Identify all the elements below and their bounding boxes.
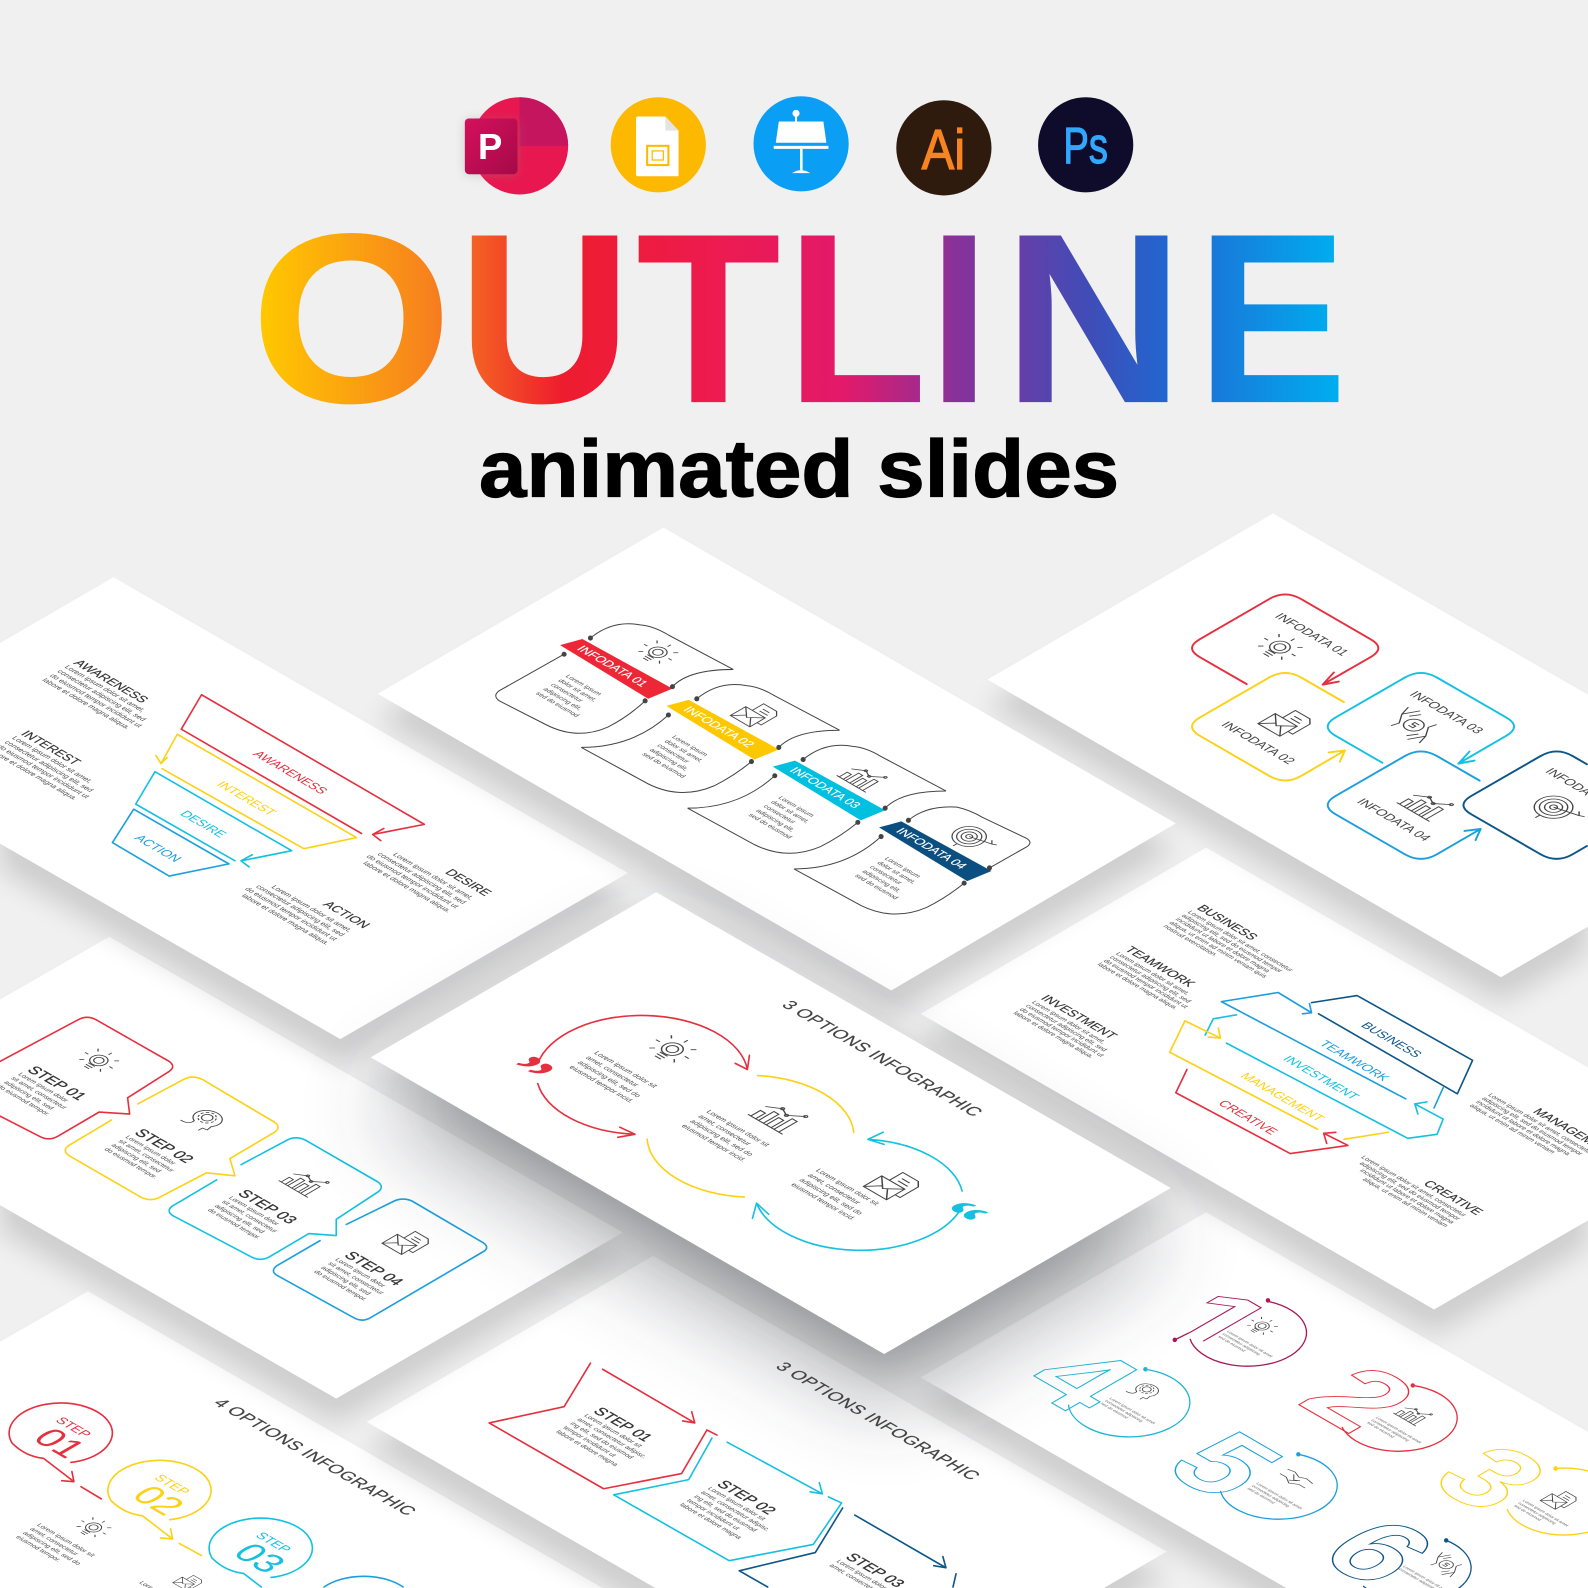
teamwork shape bbox=[1221, 992, 1443, 1108]
text: step 01: STEP 01 bbox=[23, 1064, 90, 1103]
text: step 02: do eiusmod tempor. bbox=[102, 1147, 159, 1180]
small lorem texts: sed do eiusmod bbox=[1217, 1335, 1248, 1353]
square labels bbox=[1218, 611, 1588, 843]
funnel: action bbox=[112, 809, 229, 876]
shape labels: INVESTMENT bbox=[1280, 1054, 1362, 1102]
number 1: 1 bbox=[1129, 1273, 1302, 1373]
text: investment bbox=[1011, 993, 1131, 1062]
text: investment: labore et dolore magna aliqua. bbox=[1011, 1011, 1095, 1059]
shape labels: BUSINESS bbox=[1358, 1020, 1425, 1059]
text: step 02 bbox=[102, 1126, 198, 1182]
icon: powerpoint bbox=[465, 97, 568, 194]
text: awareness bbox=[40, 657, 171, 733]
title: N bbox=[1003, 184, 1184, 454]
heading: 3 options: 3 OPTIONS INFOGRAPHIC bbox=[771, 1359, 985, 1483]
square 01 bbox=[1192, 594, 1378, 685]
text: management: aliqua, ut enim ad minim veniam bbox=[1467, 1103, 1557, 1155]
infodata 04: adipiscing elit, bbox=[860, 869, 903, 894]
text: option 2: eiusmod tempor incid. bbox=[679, 1123, 749, 1163]
text: action: labore et dolore magna aliqua. bbox=[239, 892, 332, 946]
text: step 01 lorem: Lorem ipsum dolor sit bbox=[35, 1523, 96, 1558]
text: creative: CREATIVE bbox=[1420, 1179, 1486, 1217]
icons bbox=[642, 1031, 923, 1203]
funnel: desire bbox=[136, 772, 292, 867]
infodata 04: consectetur bbox=[867, 865, 904, 886]
small lorem texts: consectetur adipiscing bbox=[1104, 1399, 1145, 1423]
small lorem texts: consectetur adipiscing bbox=[1251, 1484, 1292, 1508]
heading: 3 options: 3 OPTIONS INFOGRAPHIC bbox=[777, 998, 988, 1119]
text: desire bbox=[357, 837, 495, 916]
infodata 03 bbox=[688, 745, 946, 853]
step 02 circle: STEP bbox=[151, 1472, 194, 1497]
text: teamwork bbox=[1095, 944, 1215, 1013]
text: teamwork: TEAMWORK bbox=[1122, 944, 1199, 989]
text: step 01: STEP 01 bbox=[589, 1405, 656, 1444]
number 3: 3 bbox=[1404, 1428, 1577, 1528]
text: desire: do eiusmod tempor incididunt ut bbox=[364, 853, 461, 909]
title bbox=[250, 184, 1347, 454]
icon: illustrator bbox=[896, 100, 991, 195]
infodata 01: Lorem ipsum bbox=[563, 674, 603, 697]
text: option 3: amet, consectetur bbox=[805, 1172, 864, 1206]
text: interest: INTEREST bbox=[18, 729, 84, 767]
infodata 01 bbox=[496, 624, 733, 733]
shape labels: MANAGEMENT bbox=[1237, 1071, 1328, 1123]
infodata 04: Lorem ipsum bbox=[882, 856, 922, 879]
small lorem texts: Lorem ipsum dolor sit amet bbox=[1108, 1397, 1158, 1425]
text: step 03: sit amet, consectetur bbox=[219, 1200, 280, 1234]
text: investment: consectetur adipiscing elit, sed bbox=[1023, 1004, 1108, 1053]
text: action: Lorem ipsum dolor sit amet, bbox=[269, 884, 355, 933]
text: business: Lorem ipsum dolor sit amet, consectetur bbox=[1186, 910, 1295, 973]
title: O bbox=[250, 184, 453, 454]
text: option 2: amet, consectetur bbox=[696, 1113, 754, 1147]
step 01 box bbox=[0, 1017, 173, 1139]
infodata 04 bbox=[794, 807, 1030, 914]
text: step 02: labore et dolore magna bbox=[677, 1502, 743, 1540]
infodata 04: sed do eiusmod bbox=[853, 874, 900, 901]
icon: photoshop: Ps bbox=[1063, 117, 1108, 174]
text: awareness: do eiusmod tempor incididunt ut bbox=[48, 673, 145, 729]
text: creative: aliqua, ut enim ad minim veniam bbox=[1360, 1177, 1450, 1229]
text: step 01 bbox=[0, 1063, 91, 1119]
text: business: aliqua, ut enim ad minim veniam quis bbox=[1167, 921, 1269, 979]
infodata 03: Lorem ipsum bbox=[776, 796, 816, 819]
management shape bbox=[1170, 1021, 1388, 1139]
funnel labels: ACTION bbox=[131, 833, 185, 864]
panel: funnel bbox=[0, 577, 628, 1064]
text: desire: DESIRE bbox=[442, 867, 495, 898]
text: awareness: Lorem ipsum dolor sit amet, bbox=[62, 664, 148, 713]
text: step 01: sit amet, consectetur bbox=[9, 1076, 69, 1111]
heading: 4 options: 4 OPTIONS INFOGRAPHIC bbox=[209, 1396, 421, 1518]
small lorem texts: Lorem ipsum dolor sit amet bbox=[1226, 1330, 1275, 1358]
icon: mail bbox=[173, 1573, 204, 1588]
panel: hexagon list bbox=[921, 848, 1588, 1335]
panel: 3 options circles bbox=[371, 892, 1171, 1405]
infodata 04: dolor sit amet, bbox=[875, 861, 917, 885]
text: desire: Lorem ipsum dolor sit amet, bbox=[391, 851, 476, 901]
text: step 04: STEP 04 bbox=[340, 1249, 407, 1288]
funnel labels: INTEREST bbox=[213, 779, 280, 818]
text: interest: consectetur adipiscing elit, sed bbox=[2, 739, 96, 793]
panel: rounded squares bbox=[987, 513, 1588, 1003]
icons bbox=[1251, 630, 1588, 831]
infodata 03: dolor sit amet, bbox=[769, 800, 811, 824]
text: step 03: do eiusmod tempor. bbox=[205, 1208, 262, 1241]
text: step 03: adipiscing elit, sed bbox=[212, 1204, 266, 1235]
text: teamwork: do eiusmod tempor incididunt ut bbox=[1101, 959, 1189, 1009]
shape labels: TEAMWORK bbox=[1316, 1039, 1393, 1083]
text: business bbox=[1161, 902, 1308, 987]
funnel labels bbox=[131, 749, 331, 864]
creative shape bbox=[1176, 1069, 1348, 1154]
text: option 2: adipiscing elit, sed do bbox=[688, 1118, 756, 1157]
step 03 circle: STEP bbox=[252, 1530, 295, 1555]
text: option 3: Lorem ipsum dolor sit bbox=[814, 1167, 882, 1207]
small lorem texts: consectetur adipiscing bbox=[1221, 1332, 1262, 1356]
text: step 03: Lorem ipsum dolor bbox=[226, 1196, 281, 1227]
funnel labels: DESIRE bbox=[177, 809, 230, 839]
panel: 4 options infographic bbox=[0, 1291, 603, 1588]
text: action: consectetur adipiscing elit, sed bbox=[254, 883, 347, 938]
text: step 01: labore et dolore magna bbox=[554, 1430, 620, 1467]
text: creative bbox=[1341, 1147, 1486, 1231]
icons bbox=[73, 1045, 432, 1257]
title: I bbox=[929, 184, 989, 454]
title: E bbox=[1197, 184, 1347, 454]
text: step 02 bbox=[677, 1478, 794, 1545]
text: action: ACTION bbox=[320, 899, 373, 930]
text: step 04 bbox=[312, 1249, 408, 1304]
quote marks bbox=[482, 1047, 1002, 1241]
yellow arcs bbox=[647, 1076, 854, 1197]
small lorem texts: sed do eiusmod bbox=[1246, 1487, 1277, 1505]
small lorem texts: Lorem ipsum dolor sit amet bbox=[1255, 1482, 1304, 1510]
small lorem texts: Lorem ipsum dolor sit amet bbox=[1374, 1416, 1424, 1444]
infodata 03: INFODATA 03 bbox=[786, 765, 864, 810]
infodata 03: adipiscing elit, bbox=[754, 808, 796, 833]
business shape bbox=[1312, 996, 1473, 1094]
text: creative: adipiscing elit, sed do eiusmod tempor bbox=[1357, 1161, 1462, 1222]
text: management: incididunt ut labore et dolore magna bbox=[1474, 1100, 1572, 1157]
step 02 circle: 02 bbox=[123, 1480, 194, 1521]
text: step 01: tempor incididunt ut bbox=[561, 1425, 618, 1458]
small lorem texts: consectetur adipiscing bbox=[1370, 1418, 1411, 1442]
text: option 1: eiusmod tempor incid. bbox=[567, 1064, 636, 1104]
step 03 circle: 03 bbox=[224, 1538, 295, 1578]
text: step 03: STEP 03 bbox=[234, 1188, 301, 1226]
small lorem texts: consectetur adipiscing bbox=[1517, 1501, 1558, 1525]
text: awareness: consectetur adipiscing elit, sed bbox=[55, 668, 149, 722]
text: step 04: adipiscing elit, sed bbox=[319, 1265, 372, 1296]
app icons row bbox=[465, 96, 1133, 195]
text: investment: INVESTMENT bbox=[1038, 993, 1120, 1041]
square labels: INFODATA 02 bbox=[1218, 720, 1298, 766]
number 2: 2 bbox=[1273, 1349, 1446, 1449]
text: step 02: adipiscing elit, sed bbox=[109, 1143, 163, 1174]
text: step 01 lorem: adipiscing elit, sed do bbox=[21, 1531, 82, 1566]
infodata 03: sed do eiusmod bbox=[746, 813, 793, 840]
infodata 01: INFODATA 01 bbox=[574, 644, 652, 689]
small lorem texts: sed do eiusmod bbox=[1513, 1504, 1543, 1522]
step 01 circle: STEP bbox=[52, 1415, 95, 1440]
text: step 03 bbox=[827, 1551, 922, 1588]
small lorem texts: sed do eiusmod bbox=[1366, 1421, 1397, 1439]
small lorem texts bbox=[1099, 1330, 1571, 1588]
step 03 arrow shape bbox=[739, 1508, 956, 1587]
text: action: do eiusmod tempor incididunt ut bbox=[243, 886, 340, 942]
text: management bbox=[1467, 1085, 1588, 1174]
square labels: INFODATA 01 bbox=[1271, 611, 1352, 658]
text: option 3: eiusmod tempor incid. bbox=[789, 1182, 858, 1222]
square 04 bbox=[1328, 751, 1481, 859]
text: option 1: adipiscing elit, sed do bbox=[575, 1059, 643, 1099]
infodata 02 bbox=[581, 685, 840, 793]
text: step 04: do eiusmod tempor. bbox=[312, 1270, 369, 1302]
step 03 box bbox=[169, 1138, 381, 1259]
step 01 arrow shape bbox=[489, 1363, 717, 1489]
square labels: INFODATA 03 bbox=[1406, 689, 1487, 736]
text: step 01: Lorem ipsum dolor sit bbox=[582, 1413, 643, 1449]
step 02 circle bbox=[108, 1460, 211, 1556]
infodata 02: INFODATA 02 bbox=[680, 704, 758, 749]
text: teamwork: consectetur adipiscing elit, sed bbox=[1108, 955, 1193, 1004]
number 1 bbox=[1172, 1296, 1308, 1367]
infodata 01: adipiscing elit, bbox=[541, 687, 584, 711]
text: creative: Lorem ipsum dolor sit amet, consectetur bbox=[1359, 1155, 1468, 1218]
text: management: adipiscing elit, sed do eiusmod tempor bbox=[1480, 1096, 1585, 1157]
text: interest: Lorem ipsum dolor sit amet, bbox=[10, 735, 95, 784]
text: option 3: adipiscing elit, sed do bbox=[797, 1177, 865, 1216]
text: step 03 bbox=[205, 1187, 301, 1242]
cyan arcs bbox=[752, 1132, 962, 1250]
title: L bbox=[786, 184, 927, 454]
shape labels: CREATIVE bbox=[1215, 1098, 1281, 1137]
text: step 02: sit amet, consectetur bbox=[116, 1139, 176, 1174]
step 02 arrow shape bbox=[614, 1438, 842, 1561]
text: option 1: Lorem ipsum dolor sit bbox=[592, 1050, 660, 1089]
infodata 02: adipiscing elit, bbox=[647, 748, 690, 772]
text: desire: consectetur adipiscing elit, sed bbox=[375, 851, 469, 905]
funnel labels: AWARENESS bbox=[250, 749, 331, 796]
square 03 bbox=[1328, 673, 1514, 764]
infodata 03: consectetur bbox=[761, 804, 798, 825]
panel: step boxes bbox=[0, 937, 623, 1424]
text: investment: do eiusmod tempor incididunt ut bbox=[1017, 1007, 1105, 1058]
square 02 bbox=[1192, 673, 1345, 780]
text: creative: incididunt ut labore et dolore magna bbox=[1358, 1168, 1456, 1225]
text: business: nostrud exercitation. bbox=[1161, 924, 1219, 958]
icon: keynote bbox=[753, 96, 849, 191]
panel: numbered options bbox=[921, 1212, 1588, 1588]
text: option 1: amet, consectetur bbox=[583, 1055, 642, 1088]
text: awareness: labore et dolore magna aliqua. bbox=[40, 677, 133, 731]
funnel: interest bbox=[156, 734, 356, 849]
step 01 circle: 01 bbox=[24, 1423, 95, 1463]
text: business: BUSINESS bbox=[1193, 903, 1261, 942]
infodata 04: INFODATA 04 bbox=[893, 826, 971, 871]
icon: bulb bbox=[71, 1514, 117, 1540]
step 04 box bbox=[273, 1199, 487, 1320]
red arcs bbox=[538, 1015, 749, 1137]
text: step 02: Lorem ipsum dolor bbox=[123, 1135, 178, 1166]
text: step 02: amet, consectetur adipisc. bbox=[698, 1490, 772, 1533]
quote marks: “ bbox=[915, 1190, 1002, 1241]
infodata 02: consectetur bbox=[655, 743, 691, 765]
icon: google slides bbox=[611, 97, 706, 192]
text: step 01: Lorem ipsum dolor bbox=[16, 1072, 70, 1104]
title: T bbox=[636, 184, 781, 454]
text: step 02: Lorem ipsum dolor sit bbox=[706, 1486, 767, 1522]
square 05 bbox=[1463, 751, 1587, 859]
infodata 02: Lorem ipsum bbox=[670, 735, 710, 758]
funnel: awareness bbox=[181, 695, 424, 841]
step 02 box bbox=[65, 1077, 278, 1200]
number 5: 5 bbox=[1138, 1415, 1311, 1515]
number 4: 4 bbox=[995, 1330, 1168, 1430]
panel: 3 options arrows bbox=[367, 1256, 1167, 1588]
quote marks: ” bbox=[482, 1047, 570, 1097]
text: step 02: STEP 02 bbox=[713, 1478, 780, 1517]
text: step 01 lorem: eiusmod tempor. bbox=[14, 1535, 63, 1563]
icon: powerpoint: P bbox=[478, 126, 502, 167]
text: teamwork: labore et dolore magna aliqua. bbox=[1095, 962, 1179, 1011]
icon: photoshop bbox=[1038, 97, 1133, 192]
square labels: INFODATA 04 bbox=[1353, 797, 1434, 843]
text: step 01 lorem: amet, consectetur bbox=[28, 1527, 80, 1557]
text: business: adipiscing elit, sed do eiusmod tempor bbox=[1179, 914, 1284, 974]
step 01 circle bbox=[9, 1403, 112, 1499]
text: step 01 bbox=[554, 1405, 670, 1472]
icons bbox=[1126, 1314, 1579, 1578]
text: awareness: AWARENESS bbox=[70, 658, 152, 705]
text: step 01: amet, consectetur adipisc. bbox=[575, 1417, 648, 1460]
text: step 01: ing elit, sed do eiusmod bbox=[568, 1421, 635, 1460]
text: step 01: adipiscing elit, sed bbox=[2, 1080, 55, 1111]
text: action bbox=[235, 869, 373, 949]
text: step 04: Lorem ipsum dolor bbox=[333, 1257, 387, 1289]
step 04 circle bbox=[324, 1576, 403, 1587]
shape labels bbox=[1215, 1020, 1425, 1137]
infodata 01: sed do eiusmod bbox=[534, 691, 581, 718]
text: step 02: STEP 02 bbox=[130, 1127, 197, 1166]
subtitle: animated slides bbox=[479, 424, 1119, 514]
title: U bbox=[457, 184, 632, 454]
step 03 circle bbox=[209, 1518, 312, 1587]
text: step 02: ing elit, sed do eiusmod bbox=[691, 1494, 759, 1533]
text: teamwork: Lorem ipsum dolor sit amet, bbox=[1114, 952, 1191, 996]
panel: infodata waves bbox=[378, 528, 1176, 1016]
infodata 02: sed do eiusmod bbox=[640, 752, 687, 779]
infodata 02: dolor sit amet, bbox=[662, 739, 705, 764]
infodata 01: consectetur bbox=[548, 683, 585, 704]
text: step 02: tempor incididunt ut bbox=[684, 1498, 741, 1531]
icon: illustrator: Ai bbox=[922, 119, 965, 182]
text: desire: labore et dolore magna aliqua. bbox=[361, 860, 454, 914]
investment shape bbox=[1205, 1015, 1443, 1138]
text: investment: Lorem ipsum dolor sit amet, bbox=[1030, 1000, 1107, 1045]
infodata 01: dolor sit amet, bbox=[556, 678, 598, 703]
text: option 2: Lorem ipsum dolor sit bbox=[704, 1109, 772, 1148]
small lorem texts: Lorem ipsum dolor sit amet bbox=[1521, 1499, 1571, 1527]
text: interest bbox=[0, 728, 118, 804]
text: business: incididunt ut labore et dolore magna bbox=[1173, 917, 1271, 974]
text: step 04: sit amet, consectetur bbox=[326, 1261, 386, 1296]
small lorem texts: sed do eiusmod bbox=[1099, 1402, 1130, 1419]
